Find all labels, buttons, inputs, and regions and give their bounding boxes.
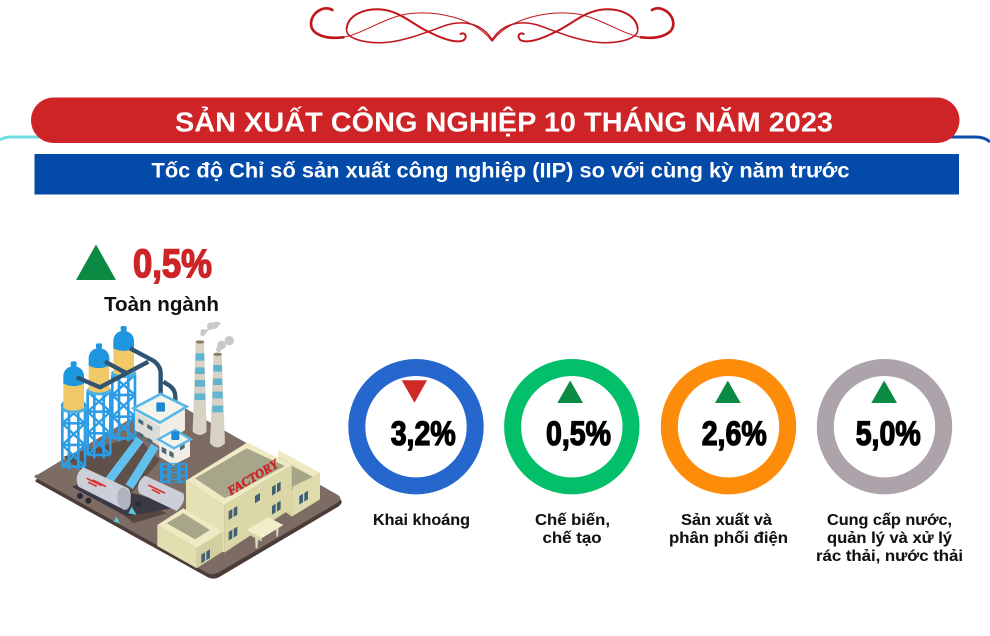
value: 0,5%: [546, 415, 611, 453]
label: electricity: Sản xuất và: [681, 512, 772, 529]
overall label: Toàn ngành: [104, 294, 219, 316]
left accent line: [0, 137, 60, 140]
overall value: 0,5%: [133, 242, 212, 286]
value: 5,0%: [856, 415, 921, 453]
factory sign: FACTORY: [224, 456, 282, 499]
decorative ornament: [311, 8, 673, 43]
label: water and waste: [816, 512, 963, 565]
label: water and waste: Cung cấp nước,: [827, 512, 952, 529]
silo tower lattices: [62, 375, 135, 470]
pipes: [77, 348, 175, 433]
windows: [201, 482, 308, 563]
label: manufacturing: [535, 512, 610, 547]
title: SẢN XUẤT CÔNG NGHIỆP 10 THÁNG NĂM 2023: [175, 106, 833, 138]
mixing building: [133, 394, 191, 483]
loading chutes: [109, 439, 155, 487]
entrance canopy: [247, 517, 283, 548]
icon: down triangle: [402, 380, 427, 403]
ring: electricity: [669, 368, 788, 486]
silos: [61, 326, 136, 413]
overall summary: [76, 242, 219, 316]
icon: up triangle: [557, 380, 583, 403]
value: 2,6%: [702, 415, 767, 453]
chimneys: [193, 322, 234, 447]
subtitle: Tốc độ Chỉ số sản xuất công nghiệp (IIP) so với cùng kỳ năm trước: [152, 160, 850, 182]
label: electricity: [669, 512, 788, 547]
label: electricity: phân phối điện: [669, 530, 788, 547]
ring: mining: [357, 368, 475, 486]
value: 3,2%: [391, 415, 456, 453]
ring: manufacturing: [513, 368, 631, 486]
icon: up triangle: [871, 380, 897, 403]
factory building: [157, 442, 320, 568]
ring: water and waste: [825, 368, 944, 486]
label: manufacturing: chế tạo: [542, 530, 602, 547]
icon: up triangle: [715, 380, 741, 403]
tanker trucks: [72, 467, 184, 523]
icon: up triangle: [76, 244, 116, 280]
ground plate: [34, 399, 342, 579]
illustration: factory: [34, 322, 342, 579]
title banner: [31, 98, 960, 143]
label: manufacturing: Chế biến,: [535, 512, 610, 529]
right accent line: [930, 137, 990, 142]
label: water and waste: quản lý và xử lý: [827, 530, 952, 547]
label: water and waste: rác thải, nước thải: [816, 548, 963, 565]
label: mining: Khai khoáng: [373, 512, 470, 529]
subtitle band: [34, 154, 959, 194]
